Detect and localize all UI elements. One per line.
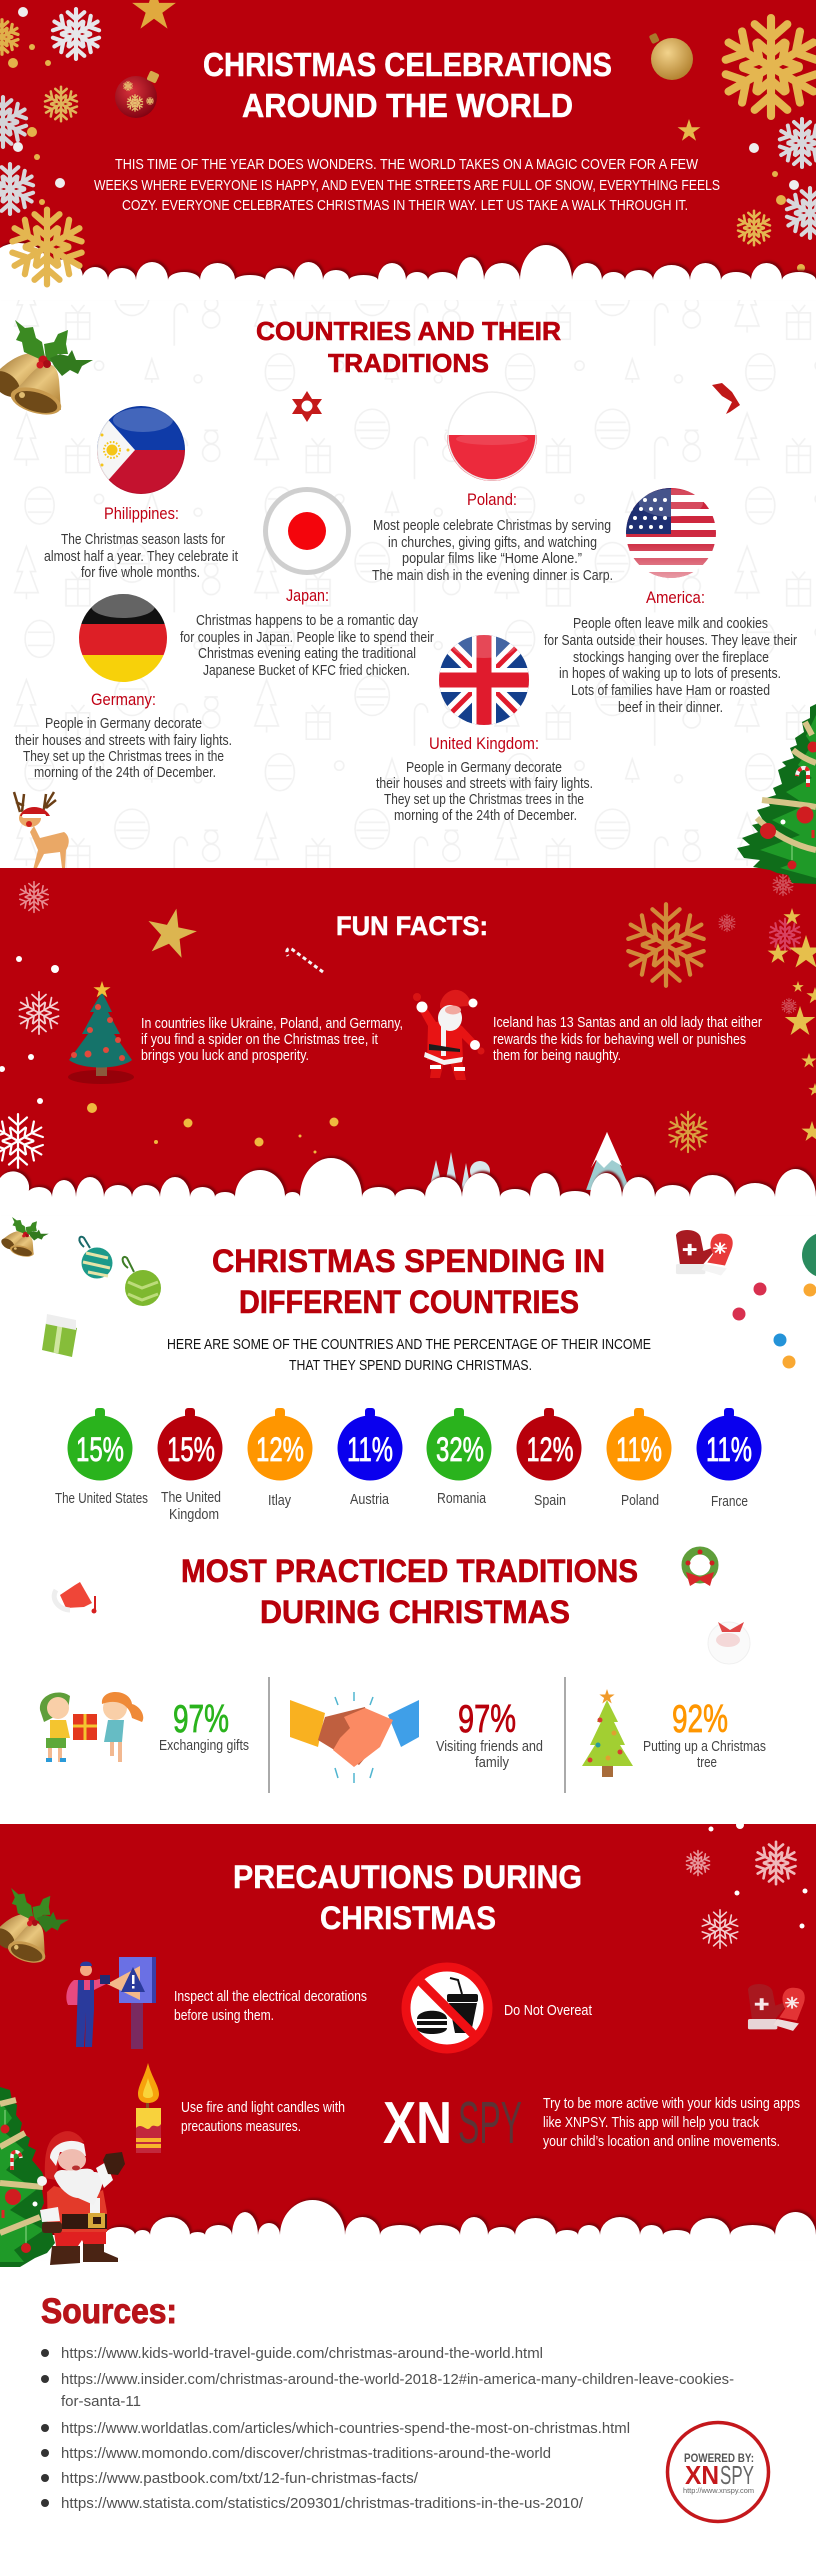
bauble: Spain	[516, 1408, 582, 1509]
icon: kids exchanging gifts	[40, 1692, 143, 1762]
logo: XNSPY: SPY	[458, 2090, 522, 2156]
text: Poland: popular films like “Home Alone.”	[402, 551, 582, 567]
text: xnspy tip: like XNPSY. This app will help you track	[543, 2115, 760, 2131]
text: Japan	[180, 613, 434, 679]
snow cloud edge: fun facts	[0, 1158, 816, 1215]
bauble: United Kingdom	[158, 1408, 222, 1523]
bauble: United States: The United States	[55, 1491, 148, 1507]
source list: for-santa-11	[61, 2393, 141, 2410]
ornament dots left	[8, 7, 65, 205]
source list: https://www.kids-world-travel-guide.com/christmas-around-the-world.html	[61, 2345, 543, 2362]
icon: red bauble	[115, 70, 160, 118]
label: Germany: Germany:	[91, 690, 156, 709]
text: fact two: rewards the kids for behaving well or punishes	[493, 1032, 746, 1048]
intro text: COZY. EVERYONE CELEBRATES CHRISTMAS IN THEIR WAY. LET US TAKE A WALK THROUGH IT.	[122, 197, 688, 214]
bauble: France	[696, 1408, 762, 1510]
text: xnspy tip: your child’s location and online movements.	[543, 2134, 780, 2150]
heading	[256, 316, 561, 378]
heading	[181, 1553, 638, 1630]
text: America: People often leave milk and cookies	[573, 616, 768, 632]
text: America	[544, 616, 797, 716]
text: fact one: if you find a spider on the Christmas tree, it	[141, 1032, 378, 1048]
icon: gold bauble	[649, 33, 693, 80]
gold stars right	[768, 908, 816, 1141]
text: United Kingdom: People in Germany decorate	[406, 760, 562, 776]
text: fact one	[141, 1016, 403, 1064]
text: Philippines: almost half a year. They celebrate it	[44, 549, 238, 565]
bauble: Poland: 11%	[616, 1431, 662, 1469]
logo: XNSPY: XN	[383, 2090, 452, 2156]
text: United Kingdom: morning of the 24th of December.	[394, 808, 577, 824]
subheading	[167, 1336, 651, 1374]
stat: Christmas tree: Putting up a Christmas	[643, 1739, 766, 1755]
icon: wreath	[686, 1550, 714, 1586]
panel: fun facts	[0, 868, 816, 1208]
icon: handshake	[290, 1692, 419, 1783]
icon: teal Christmas tree	[68, 981, 134, 1084]
panel: sources	[41, 2292, 768, 2522]
source list: https://www.pastbook.com/txt/12-fun-christmas-facts/	[61, 2470, 419, 2487]
divider	[564, 1677, 566, 1793]
text: inspect: Inspect all the electrical decorations	[174, 1989, 367, 2005]
icon: reindeer	[14, 792, 69, 870]
bauble: Italy: 12%	[256, 1431, 304, 1469]
text: Germany: morning of the 24th of December.	[34, 765, 216, 781]
icon: big gold snowflake bottom left	[8, 210, 86, 284]
stat: visiting friends: family	[475, 1755, 510, 1771]
heading: Sources:	[41, 2292, 177, 2331]
heading: PRECAUTIONS DURING	[233, 1859, 582, 1895]
text: Japan: Christmas happens to be a romantic day	[196, 613, 419, 629]
bauble: Austria: 11%	[347, 1431, 393, 1469]
icon: electrician inspecting panel	[66, 1957, 156, 2049]
icon: faded red hat	[54, 1582, 96, 1614]
text: Japan: Japanese Bucket of KFC fried chicken.	[203, 663, 410, 679]
stat: Christmas tree: tree	[697, 1755, 717, 1771]
panel: countries pattern background	[0, 285, 816, 870]
bauble: Poland	[606, 1408, 672, 1509]
icon: lime Christmas tree	[582, 1689, 633, 1777]
intro text: THIS TIME OF THE YEAR DOES WONDERS. THE WORLD TAKES ON A MAGIC COVER FOR A FEW	[115, 156, 699, 173]
icon: mittens	[676, 1230, 733, 1276]
icon: no food sign	[406, 1967, 488, 2049]
text: fact two	[493, 1015, 762, 1064]
text: United Kingdom: They set up the Christmas trees in the	[384, 792, 584, 808]
title	[203, 46, 612, 124]
text: inspect	[174, 1989, 367, 2024]
text: fact two: them for being naughty.	[493, 1048, 621, 1064]
text: Germany: They set up the Christmas trees in the	[23, 749, 224, 765]
flag: Japan	[263, 487, 351, 575]
bauble: France: France	[711, 1494, 748, 1510]
label: America: America:	[646, 588, 705, 607]
icon: faded Santa ornament	[708, 1622, 750, 1664]
icon: Christmas tree bottom left	[0, 2087, 55, 2267]
label: United Kingdom: United Kingdom:	[429, 734, 539, 753]
icon: small holly bells	[0, 1217, 49, 1259]
stat: visiting friends: 97%	[458, 1698, 516, 1741]
bauble: United States	[55, 1408, 148, 1507]
bauble: Romania: Romania	[437, 1491, 487, 1507]
text: Japan: for couples in Japan. People like to spend their	[180, 630, 434, 646]
heading: COUNTRIES AND THEIR	[256, 316, 561, 346]
heading: TRADITIONS	[328, 348, 489, 378]
bauble: Spain: Spain	[534, 1493, 566, 1509]
text: candles: Use fire and light candles with	[181, 2100, 345, 2116]
bauble: France: 11%	[706, 1431, 752, 1469]
subheading: THAT THEY SPEND DURING CHRISTMAS.	[289, 1357, 532, 1374]
text: Germany	[15, 716, 232, 781]
logo: XNSPY	[383, 2090, 522, 2156]
icon: holly bells	[0, 1888, 69, 1967]
text: inspect: before using them.	[174, 2008, 274, 2024]
stat: exchanging gifts: 97%	[173, 1698, 229, 1741]
icon: green circle and dots	[732, 1232, 816, 1368]
dots	[0, 956, 338, 1154]
label: Poland: Poland:	[467, 490, 517, 509]
icon: Santa waving	[413, 990, 484, 1080]
flag: Philippines	[97, 406, 185, 494]
intro text	[94, 156, 720, 214]
source list: https://www.momondo.com/discover/christmas-traditions-around-the-world	[61, 2445, 551, 2462]
icon: snowy trees	[429, 1152, 490, 1190]
flag: United Kingdom	[439, 634, 529, 725]
text: Philippines	[44, 532, 238, 581]
snow cloud edge: precautions	[0, 2200, 816, 2260]
dots and snowflakes	[685, 1821, 808, 1948]
title: CHRISTMAS CELEBRATIONS	[203, 46, 612, 83]
icon: small gold star	[678, 119, 700, 141]
flag: Germany	[79, 594, 167, 683]
flag: Poland	[447, 391, 537, 481]
text: Poland	[372, 518, 613, 584]
badge: powered by XNSPY	[668, 2422, 768, 2522]
bauble: Romania: 32%	[436, 1431, 484, 1469]
text: Poland: Most people celebrate Christmas by serving	[373, 518, 611, 534]
icon: Santa bottom left	[37, 2131, 125, 2265]
panel: most practiced traditions	[40, 1550, 766, 1793]
text: Poland: in churches, giving gifts, and watching	[388, 535, 597, 551]
bauble: Austria	[338, 1408, 402, 1508]
text: America: stockings hanging over the fireplace	[573, 650, 769, 666]
panel: countries and traditions	[0, 316, 797, 870]
title: AROUND THE WORLD	[242, 87, 573, 124]
heading: DURING CHRISTMAS	[260, 1594, 570, 1630]
source list: https://www.insider.com/christmas-around-the-world-2018-12#in-america-many-children-leave-cookies-	[61, 2371, 734, 2388]
text: Germany: People in Germany decorate	[45, 716, 202, 732]
source list	[41, 2345, 734, 2512]
text: fact one: brings you luck and prosperity.	[141, 1048, 309, 1064]
heading	[233, 1859, 582, 1936]
text: America: in hopes of waking up to lots of presents.	[559, 666, 781, 682]
heading: MOST PRACTICED TRADITIONS	[181, 1553, 638, 1589]
text: Germany: their houses and streets with fairy lights.	[15, 733, 232, 749]
snow cloud edge: header	[0, 243, 816, 300]
divider	[268, 1677, 270, 1793]
stat: exchanging gifts: Exchanging gifts	[159, 1738, 249, 1754]
decorative snowflakes left	[0, 9, 102, 214]
bauble: Italy: Itlay	[268, 1493, 292, 1509]
heading: FUN FACTS:	[336, 911, 488, 941]
source list: https://www.statista.com/statistics/209301/christmas-traditions-in-the-us-2010/	[61, 2495, 584, 2512]
bauble: Austria: Austria	[350, 1492, 390, 1508]
badge: powered by XNSPY: SPY	[720, 2460, 754, 2490]
icon: green gift	[42, 1314, 77, 1357]
icon: red star	[292, 391, 322, 422]
icon: mittens	[748, 1984, 805, 2031]
bauble: United States: 15%	[76, 1431, 124, 1469]
icon: snowy pine	[586, 1132, 630, 1190]
label: Japan: Japan:	[286, 586, 329, 605]
icon: gold star	[142, 903, 201, 960]
panel: precautions	[0, 1821, 816, 2244]
bauble: United Kingdom: 15%	[167, 1431, 215, 1469]
badge: powered by XNSPY: http://www.xnspy.com	[683, 2486, 754, 2495]
text: Poland: The main dish in the evening dinner is Carp.	[372, 568, 613, 584]
icon: candle	[136, 2063, 161, 2153]
label: Philippines: Philippines:	[104, 504, 179, 523]
flag: America	[626, 488, 716, 579]
heading: DIFFERENT COUNTRIES	[239, 1284, 579, 1320]
icon: teal ornament	[79, 1237, 112, 1278]
text: Philippines: The Christmas season lasts for	[61, 532, 225, 548]
heading: CHRISTMAS	[320, 1900, 496, 1936]
badge: powered by XNSPY: XN	[685, 2460, 719, 2490]
stat: Christmas tree	[643, 1698, 766, 1771]
icon: large Christmas tree right	[737, 704, 816, 884]
bauble: Poland: Poland	[621, 1493, 659, 1509]
bauble: United Kingdom: The United	[161, 1490, 221, 1506]
subheading: HERE ARE SOME OF THE COUNTRIES AND THE PERCENTAGE OF THEIR INCOME	[167, 1336, 651, 1353]
stat: visiting friends: Visiting friends and	[436, 1739, 543, 1755]
text: United Kingdom: their houses and streets with fairy lights.	[376, 776, 593, 792]
panel: spending	[0, 1217, 816, 1523]
icon: holly bells	[0, 320, 93, 420]
text: fact two: Iceland has 13 Santas and an old lady that either	[493, 1015, 762, 1031]
icon: gold star top	[132, 0, 176, 29]
bauble: United Kingdom: Kingdom	[169, 1507, 219, 1523]
bauble: Spain: 12%	[526, 1431, 574, 1469]
badge: powered by XNSPY: POWERED BY:	[684, 2451, 754, 2465]
bauble: Italy	[248, 1408, 312, 1509]
icon: candy cane	[287, 949, 323, 972]
stat: visiting friends	[436, 1698, 543, 1771]
decorative snowflakes	[0, 874, 802, 1168]
icon: red stocking	[712, 383, 740, 414]
bauble: Romania	[426, 1408, 492, 1507]
text: America: beef in their dinner.	[618, 700, 723, 716]
heading: CHRISTMAS SPENDING IN	[212, 1243, 605, 1279]
text: do not overeat: Do Not Overeat	[504, 2003, 592, 2019]
text: America: Lots of families have Ham or roasted	[571, 683, 770, 699]
decorative snowflakes right	[720, 18, 816, 245]
text: United Kingdom	[376, 760, 593, 824]
text: fact one: In countries like Ukraine, Poland, and Germany,	[141, 1016, 403, 1032]
stat: Christmas tree: 92%	[672, 1698, 728, 1741]
icon: green ornament	[123, 1257, 161, 1306]
panel: header	[0, 0, 816, 290]
text: Japan: Christmas evening eating the traditional	[198, 646, 416, 662]
text: Philippines: for five whole months.	[81, 565, 200, 581]
text: candles: precautions measures.	[181, 2119, 301, 2135]
heading	[212, 1243, 605, 1320]
text: xnspy tip	[543, 2096, 800, 2150]
ornament dots right	[749, 143, 805, 272]
source list: https://www.worldatlas.com/articles/which-countries-spend-the-most-on-christmas.html	[61, 2420, 630, 2437]
stat: exchanging gifts	[159, 1698, 249, 1754]
text: candles	[181, 2100, 345, 2135]
